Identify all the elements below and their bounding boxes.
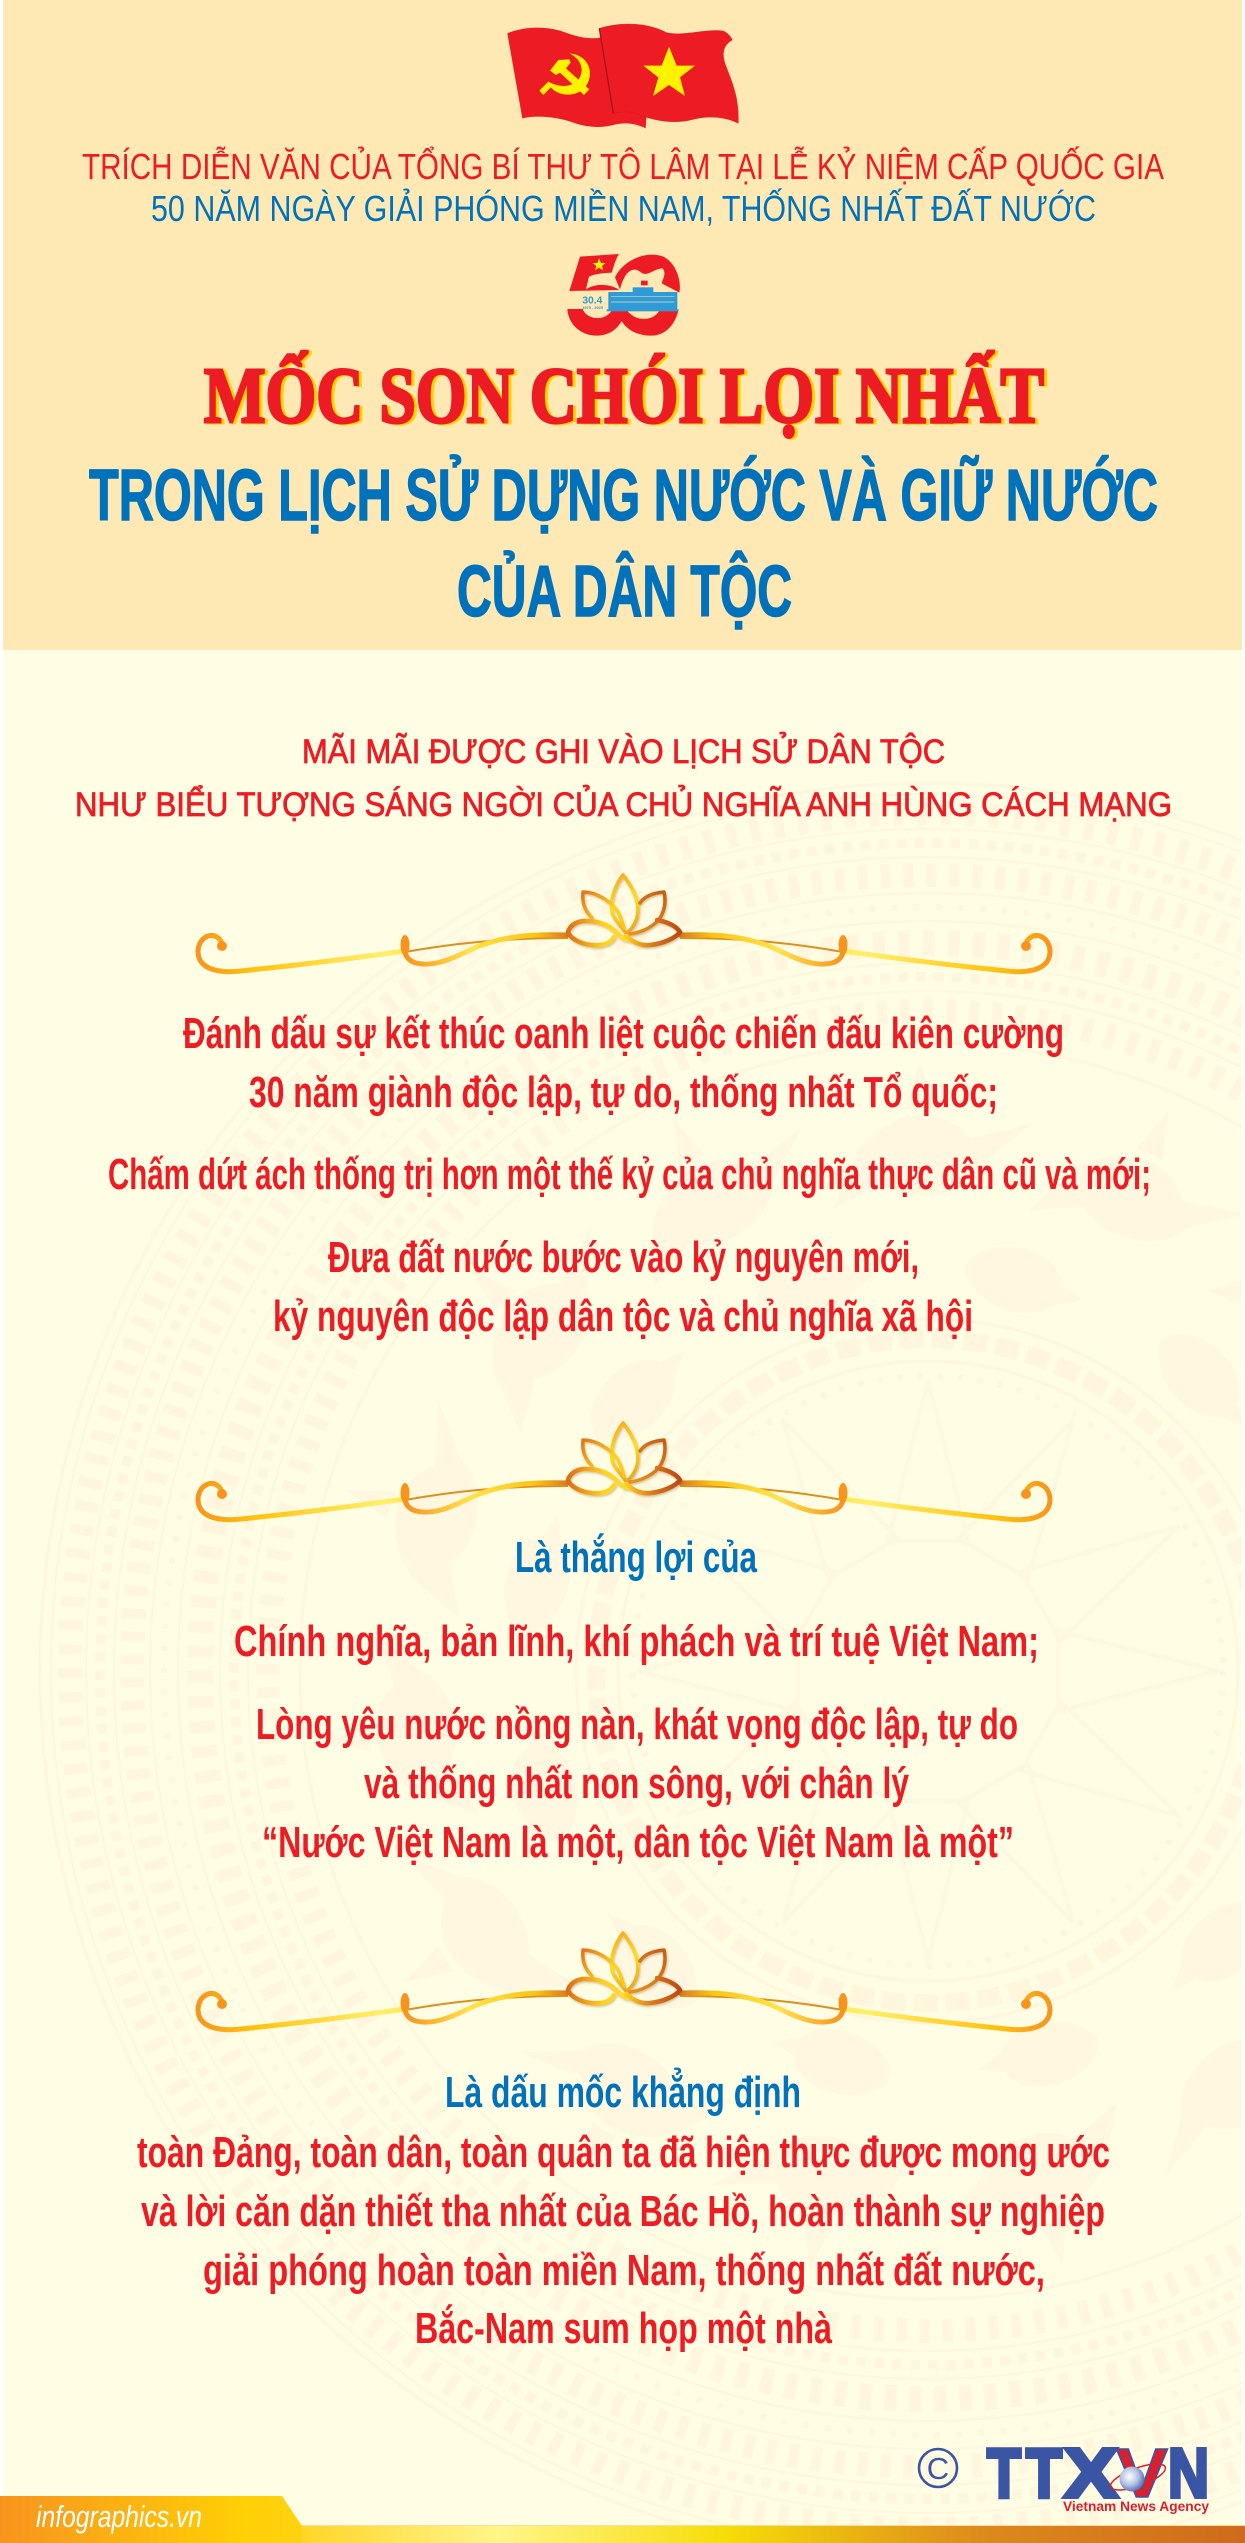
text: anniversary line: 50 NĂM NGÀY GIẢI PHÓNG MIỀN NAM, THỐNG NHẤT ĐẤT NƯỚC <box>151 187 1096 229</box>
text block: first group: Đưa đất nước bước vào kỷ nguyên mới, <box>328 1233 919 1282</box>
text block: third group: Là dấu mốc khẳng định <box>445 2066 801 2117</box>
ornament: lotus divider 2 <box>198 1423 1050 1520</box>
ornament: lotus divider 3 <box>198 1933 1050 2030</box>
text block: first group <box>108 1009 1151 1341</box>
text: infographics.vn: infographics.vn <box>36 2499 202 2534</box>
footer bar <box>0 2496 1245 2543</box>
logo: TTXVN Vietnam News Agency: T <box>987 2434 1021 2512</box>
title: red headline: MỐC SON CHÓI LỌI NHẤT <box>204 352 1044 440</box>
text block: first group: kỷ nguyên độc lập dân tộc và chủ nghĩa xã hội <box>273 1292 973 1341</box>
icon: 50th anniversary logo <box>567 254 680 336</box>
logo: TTXVN Vietnam News Agency: X <box>1064 2434 1118 2512</box>
ornament: lotus divider 1 <box>198 875 1050 972</box>
icon: copyright symbol <box>919 2449 957 2487</box>
logo: TTXVN Vietnam News Agency: T <box>1026 2434 1062 2512</box>
section heading: MÃI MÃI ĐƯỢC GHI VÀO LỊCH SỬ DÂN TỘC <box>302 733 945 771</box>
icon: party and national flags <box>507 24 738 128</box>
text block: second group <box>234 1532 1039 1867</box>
logo: TTXVN Vietnam News Agency: N <box>1168 2434 1209 2512</box>
section heading <box>75 733 1172 824</box>
text block: second group: Là thắng lợi của <box>515 1532 757 1582</box>
text block: third group: Bắc-Nam sum họp một nhà <box>415 2303 832 2353</box>
logo: TTXVN Vietnam News Agency: V <box>1116 2434 1168 2512</box>
text block: third group <box>137 2066 1110 2353</box>
logo: TTXVN Vietnam News Agency <box>987 2434 1209 2514</box>
section heading: NHƯ BIỂU TƯỢNG SÁNG NGỜI CỦA CHỦ NGHĨA ANH HÙNG CÁCH MẠNG <box>75 786 1172 824</box>
icon: copyright symbol: C <box>927 2451 949 2486</box>
text block: second group: và thống nhất non sông, với chân lý <box>364 1759 909 1808</box>
icon: 50th anniversary logo: 30.4 <box>582 295 603 306</box>
title: blue headline line 2: CỦA DÂN TỘC <box>457 551 792 632</box>
icon: 50th anniversary logo: 1975 - 2025 <box>582 306 603 310</box>
title: red headline: MỐC SON CHÓI LỌI NHẤT <box>207 353 1047 441</box>
logo: TTXVN Vietnam News Agency: Vietnam News Agency <box>1063 2498 1209 2514</box>
panel: header <box>3 0 1242 650</box>
footer tab <box>0 2496 302 2543</box>
background pattern: bronze drum <box>40 783 1245 2543</box>
